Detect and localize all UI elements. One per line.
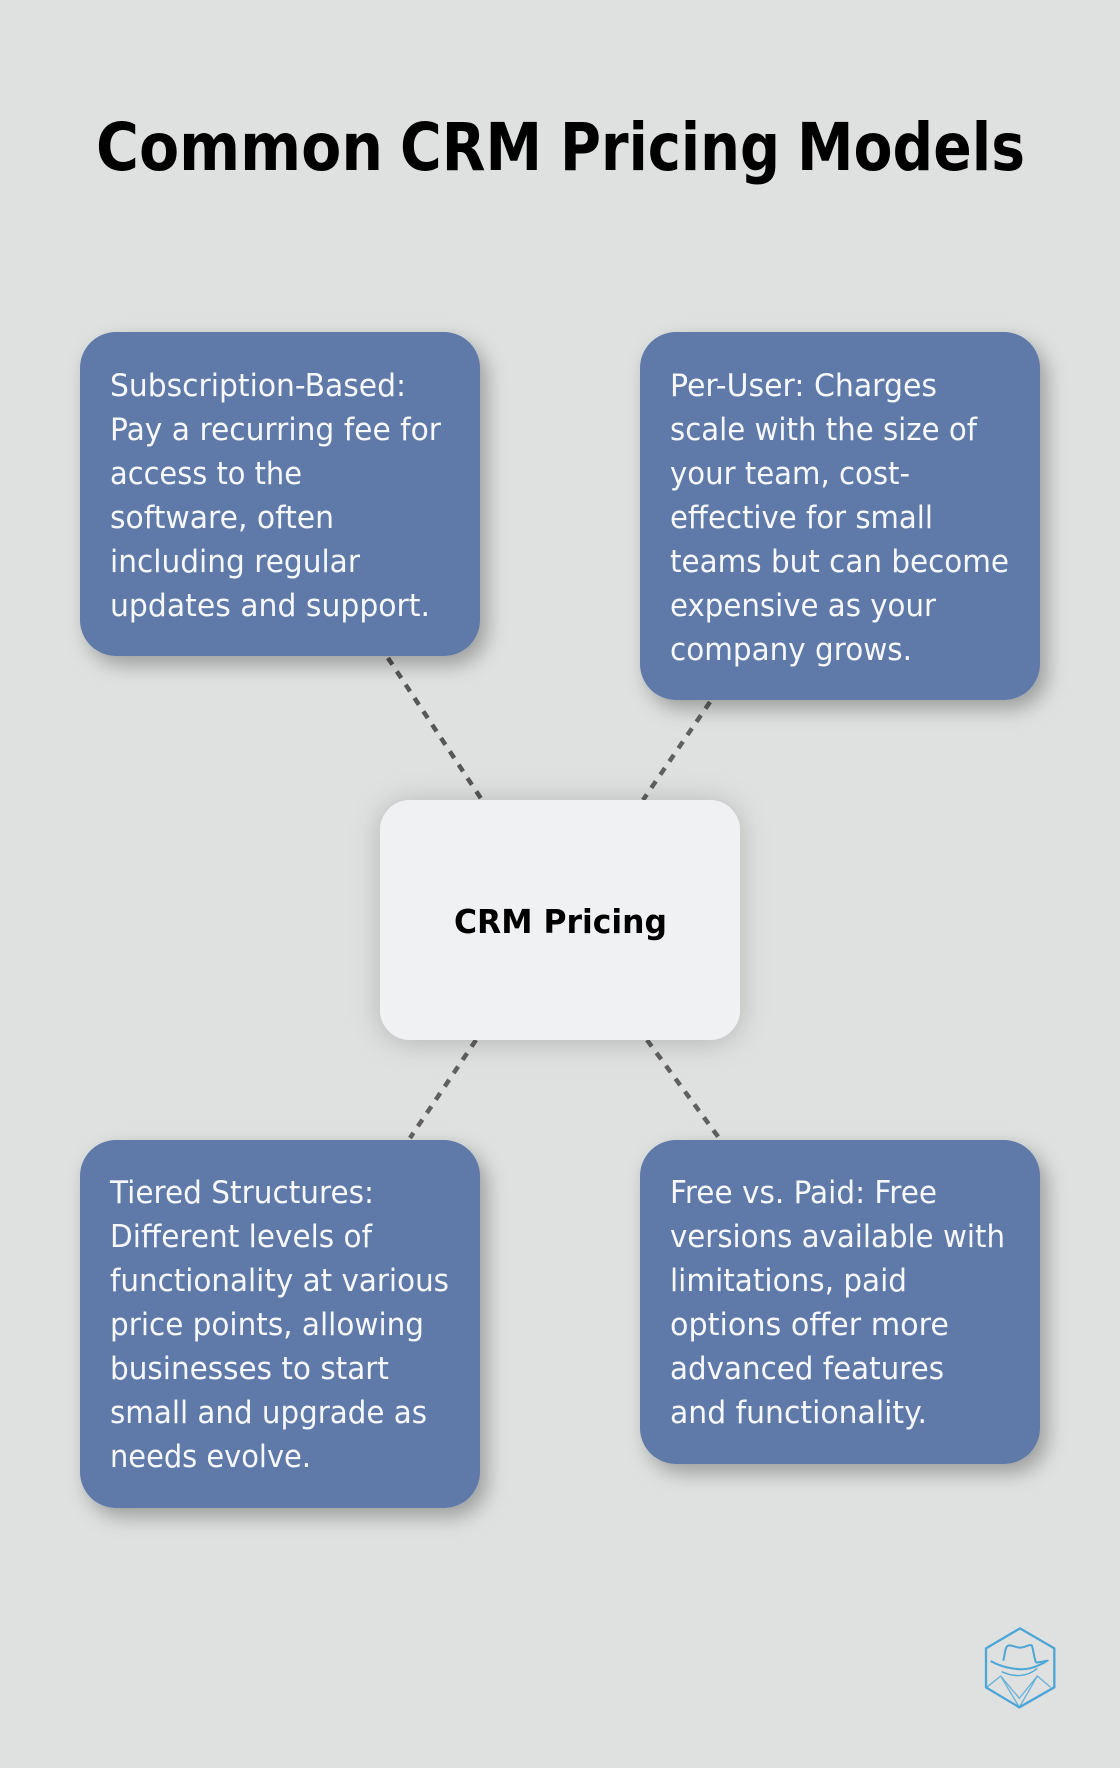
title: CRM (400, 109, 542, 186)
title: Pricing (560, 109, 780, 186)
text: free vs paid description: and functionality. (670, 1395, 927, 1431)
text: per-user description: scale with the size of (670, 412, 978, 448)
title: Common (96, 109, 383, 186)
text: per-user description (670, 368, 1009, 668)
text: subscription-based description: access to the (110, 456, 302, 492)
panel: per-user (640, 332, 1040, 700)
text: free vs paid description (670, 1175, 1005, 1431)
text: tiered structures description: businesses to start (110, 1351, 389, 1387)
text: subscription-based description: updates and support. (110, 588, 430, 624)
text: subscription-based description: software, often (110, 500, 334, 536)
connector: subscription to center (388, 658, 482, 800)
text: tiered structures description: Tiered Structures: (109, 1175, 374, 1211)
text: subscription-based description: Subscription-Based: (110, 368, 406, 404)
text: per-user description: company grows. (670, 632, 912, 668)
text: per-user description: Per-User: Charges (670, 368, 937, 404)
title: Models (797, 109, 1025, 186)
text: per-user description: effective for small (670, 500, 933, 536)
text: subscription-based description (110, 368, 441, 624)
text: per-user description: expensive as your (670, 588, 936, 624)
text: tiered structures description: needs evolve. (110, 1439, 311, 1475)
panel: subscription-based (80, 332, 480, 656)
text: free vs paid description: advanced features (670, 1351, 944, 1387)
text: per-user description: teams but can become (670, 544, 1009, 580)
connector: per-user to center (643, 702, 710, 800)
title (96, 109, 1025, 186)
connector: tiered to center (410, 1040, 476, 1138)
text: free vs paid description: versions available with (670, 1219, 1005, 1255)
icon: spy hat hexagon logo (986, 1628, 1054, 1707)
text: free vs paid description: options offer more (670, 1307, 949, 1343)
text: per-user description: your team, cost- (670, 456, 910, 492)
panel: free vs paid (640, 1140, 1040, 1464)
text: free vs paid description: limitations, paid (670, 1263, 907, 1299)
connector: free vs paid to center (647, 1040, 722, 1142)
text: tiered structures description (109, 1175, 449, 1475)
center label: CRM Pricing (454, 902, 667, 941)
text: tiered structures description: Different levels of (110, 1219, 373, 1255)
panel: center node (380, 800, 740, 1040)
text: tiered structures description: functionality at various (110, 1263, 449, 1299)
panel: tiered structures (80, 1140, 480, 1508)
text: subscription-based description: Pay a recurring fee for (110, 412, 441, 448)
text: free vs paid description: Free vs. Paid: Free (670, 1175, 937, 1211)
text: tiered structures description: small and upgrade as (110, 1395, 427, 1431)
text: tiered structures description: price points, allowing (110, 1307, 424, 1343)
text: subscription-based description: including regular (110, 544, 360, 580)
